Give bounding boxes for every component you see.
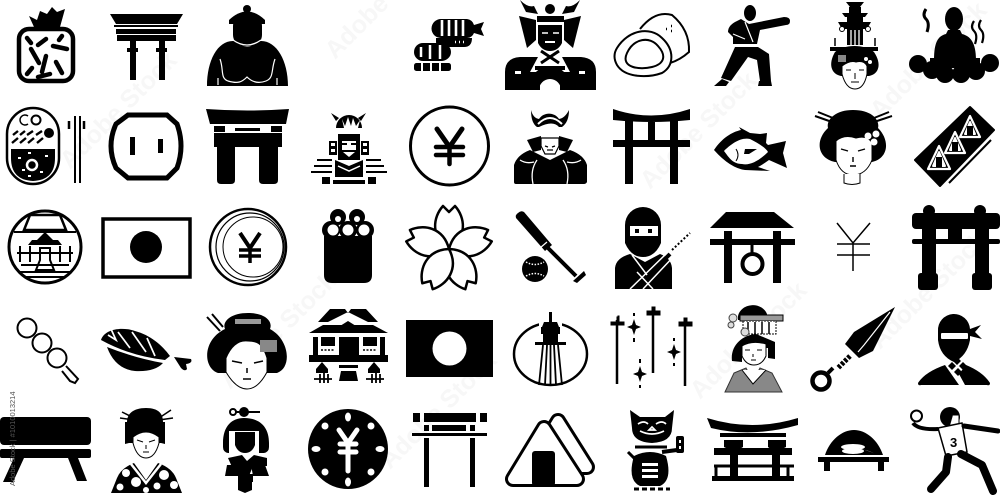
icon: torii outline <box>412 413 487 487</box>
icon: torii gate 2 <box>613 109 690 184</box>
icon: geisha flower kimono <box>111 408 182 493</box>
icon: baseball bat and ball <box>516 211 586 283</box>
icon: karate fighter <box>714 5 790 86</box>
icon: wooden bench <box>0 417 91 482</box>
icon: japan flag solid <box>406 320 493 377</box>
icon: sushi capsule and chopsticks <box>7 108 84 184</box>
icon: wide torii <box>707 418 798 481</box>
icon: gong gate <box>710 212 795 283</box>
watermark: Adobe Stock <box>54 46 182 174</box>
icon: kunai <box>812 307 895 390</box>
icon: thin yen <box>837 223 870 271</box>
watermark: Adobe Stock <box>634 66 762 194</box>
icon: lucky cat <box>628 410 684 489</box>
watermark: Adobe Stock <box>684 276 812 404</box>
icon: geisha with pagoda <box>830 2 879 89</box>
icon: lacquer stand <box>818 430 889 471</box>
watermark: Adobe Stock <box>214 266 342 394</box>
icon: heavy torii <box>912 205 1000 290</box>
icon: pixel samurai <box>311 113 387 184</box>
watermark: Adobe Stock <box>864 0 992 124</box>
icon: torii gate 1 <box>110 14 183 80</box>
icon: onsen bather <box>909 7 999 83</box>
icon: sumo wrestler <box>207 5 288 86</box>
icon: sakura flower <box>404 206 494 293</box>
icon: sake cup with dots <box>322 209 374 283</box>
watermark: Adobe Stock <box>374 346 502 474</box>
icon: yen clock <box>308 409 388 489</box>
icon: small geisha figure <box>223 407 269 493</box>
icon: temple <box>309 309 388 383</box>
id stamp: Adobe Stock | #1010013214 <box>8 391 17 486</box>
icon: samurai armour <box>514 110 587 184</box>
icon: tower in circle <box>514 312 587 385</box>
icon: shrimp sushi <box>101 329 191 371</box>
icon: dango skewer <box>18 318 78 383</box>
icon: samurai bust <box>505 0 596 90</box>
icon: baseball player <box>911 407 998 491</box>
icon: castle emblem <box>9 211 81 283</box>
watermark: Adobe Stock <box>864 226 992 354</box>
icon: rice pack <box>19 7 73 81</box>
icon: ninja <box>615 207 690 289</box>
icon: geisha grey kimono <box>725 305 783 392</box>
icon: geisha face <box>815 110 892 184</box>
icon: sushi rolls <box>414 19 484 71</box>
icon: ninja bust <box>918 314 990 385</box>
icon: onigiri <box>513 421 587 486</box>
icon: baseball player: 3 <box>950 435 957 450</box>
icon: tuna fish <box>714 127 787 171</box>
icon: yen coin stack <box>210 209 286 285</box>
icon: japan flag outline <box>103 219 190 277</box>
icon: geisha with comb <box>207 313 287 389</box>
icon: yen coin circle <box>410 107 488 185</box>
icon: stout torii <box>206 109 289 184</box>
icon: hairpin sticks <box>611 307 692 388</box>
icon: mochi <box>614 14 689 76</box>
icon: sushi tray <box>915 107 994 186</box>
icon: power outlet <box>111 115 181 178</box>
